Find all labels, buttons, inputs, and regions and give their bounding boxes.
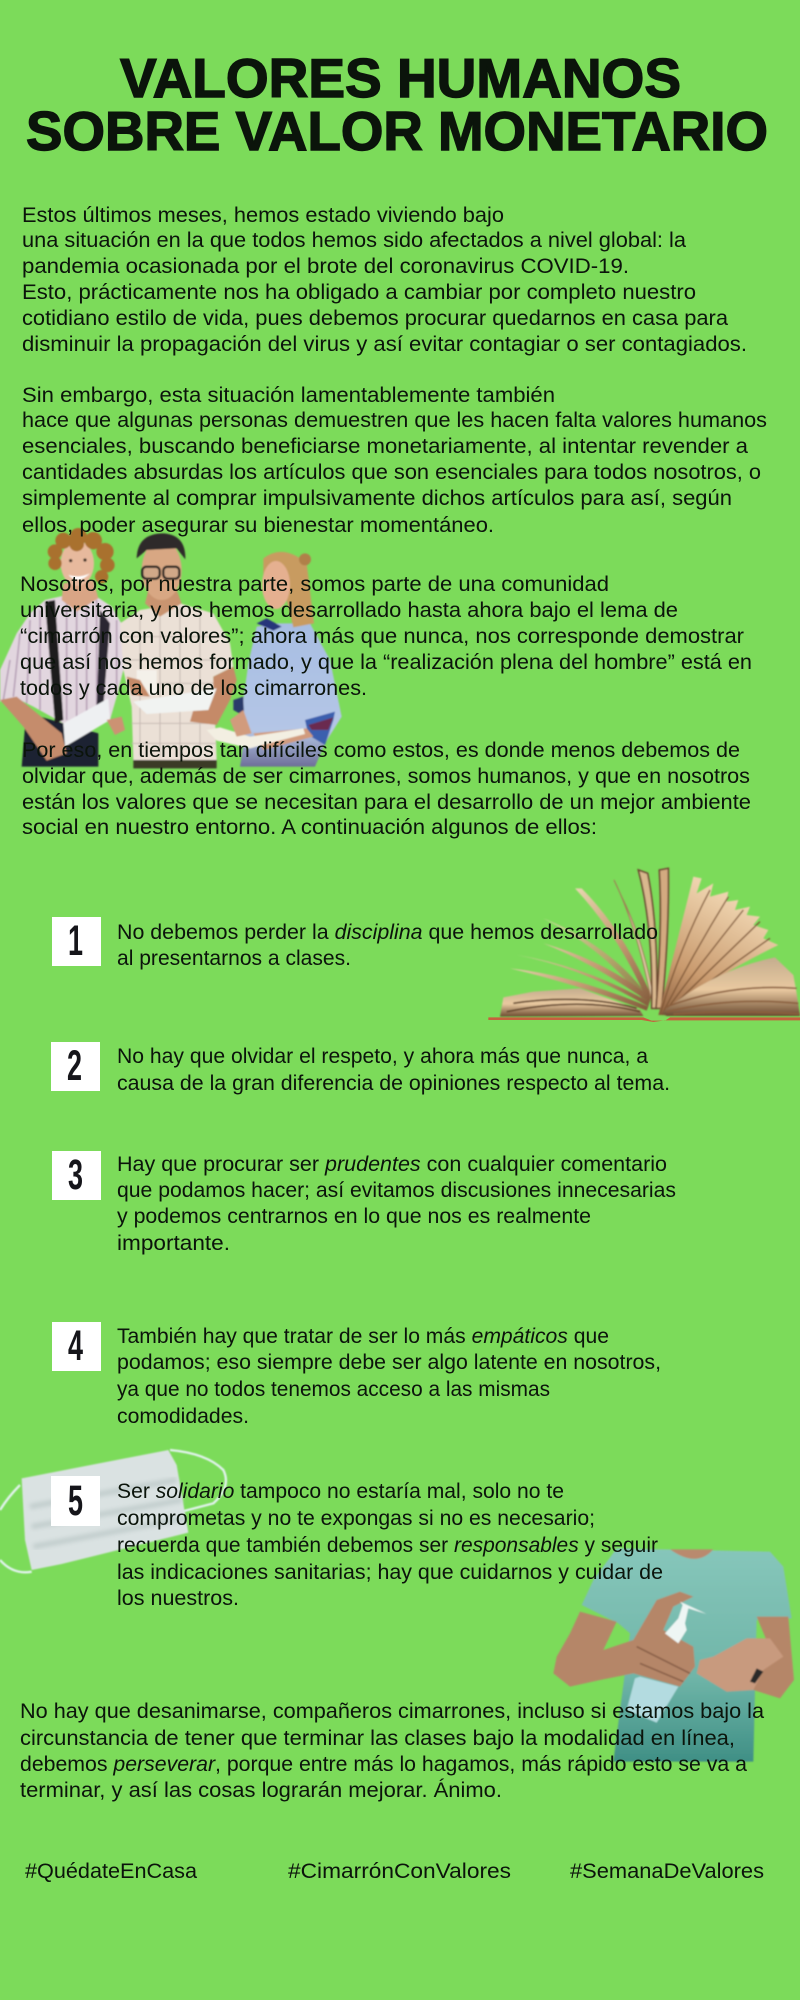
person middle — [120, 533, 237, 768]
value 5: recuerda que también debemos ser responsables y seguir — [117, 1533, 658, 1557]
intro paragraph 2: ellos, poder asegurar su bienestar momentáneo. — [22, 513, 494, 537]
intro paragraph 1: una situación en la que todos hemos sido afectados a nivel global: la — [22, 228, 686, 252]
intro paragraph 2 — [22, 383, 767, 537]
value 1: al presentarnos a clases. — [117, 946, 351, 970]
value 3: y podemos centrarnos en lo que nos es realmente — [117, 1204, 591, 1228]
number badge 2 — [51, 1042, 100, 1091]
value 4 — [52, 1322, 661, 1428]
value 5: Ser solidario tampoco no estaría mal, solo no te — [117, 1479, 564, 1503]
intro paragraph 2: cantidades absurdas los artículos que son esenciales para todos nosotros, o — [22, 460, 761, 484]
hashtags: #QuédateEnCasa — [25, 1859, 197, 1883]
sanitizer bottle — [627, 1677, 678, 1723]
closing paragraph: debemos perseverar, porque entre más lo hagamos, más rápido esto se va a — [20, 1752, 747, 1776]
intro paragraph 2: simplemente al comprar impulsivamente dichos artículos para así, según — [22, 486, 732, 510]
mask ear loops — [0, 1450, 226, 1572]
intro paragraph 1: Estos últimos meses, hemos estado viviendo bajo — [22, 203, 504, 227]
value 3 — [52, 1151, 676, 1255]
closing paragraph: No hay que desanimarse, compañeros cimarrones, incluso si estamos bajo la — [20, 1699, 764, 1723]
intro paragraph 3: universitaria, y nos hemos desarrollado hasta ahora bajo el lema de — [20, 598, 678, 622]
closing paragraph: circunstancia de tener que terminar las clases bajo la modalidad en línea, — [20, 1726, 735, 1750]
intro paragraph 3 — [20, 572, 752, 700]
value 2: No hay que olvidar el respeto, y ahora más que nunca, a — [117, 1044, 648, 1068]
intro paragraph 1: Esto, prácticamente nos ha obligado a cambiar por completo nuestro — [22, 280, 696, 304]
value 4: comodidades. — [117, 1404, 249, 1428]
photo: surgical mask — [0, 1450, 226, 1572]
number badge 3 — [52, 1151, 101, 1200]
value 1 — [52, 917, 658, 970]
mask body — [22, 1450, 188, 1570]
value 4: podamos; eso siempre debe ser algo latente en nosotros, — [117, 1350, 661, 1374]
intro paragraph 1: cotidiano estilo de vida, pues debemos procurar quedarnos en casa para — [22, 306, 728, 330]
intro paragraph 4 — [22, 738, 751, 839]
value 5: los nuestros. — [117, 1586, 239, 1610]
intro paragraph 2: hace que algunas personas demuestren que les hacen falta valores humanos — [22, 408, 767, 432]
closing paragraph: terminar, y así las cosas lograrán mejorar. Ánimo. — [20, 1777, 502, 1802]
intro paragraph 1: pandemia ocasionada por el brote del coronavirus COVID-19. — [22, 254, 629, 278]
arms and hands — [553, 1592, 695, 1687]
hashtags: #SemanaDeValores — [570, 1859, 764, 1883]
intro paragraph 1 — [22, 203, 747, 356]
intro paragraph 4: están los valores que se necesitan para el desarrollo de un mejor ambiente — [22, 790, 751, 814]
value 3: Hay que procurar ser prudentes con cualquier comentario — [117, 1152, 667, 1176]
curly hair — [48, 528, 115, 583]
number badge 1 — [52, 917, 101, 966]
value 1: No debemos perder la disciplina que hemos desarrollado — [117, 920, 658, 944]
value 2 — [51, 1042, 670, 1095]
title: VALORES HUMANOS — [120, 47, 681, 109]
closing paragraph — [20, 1699, 764, 1802]
number badge 4: 4 — [68, 1322, 83, 1370]
value 2: causa de la gran diferencia de opiniones respecto al tema. — [117, 1071, 670, 1095]
photo: open book — [488, 868, 800, 1022]
value 5 — [51, 1476, 663, 1610]
title: SOBRE VALOR MONETARIO — [26, 100, 768, 162]
person left — [0, 528, 125, 767]
photo: hands with sanitizer — [553, 1548, 794, 1762]
intro paragraph 2: Sin embargo, esta situación lamentablemente también — [22, 383, 555, 407]
teal shirt — [582, 1548, 792, 1762]
intro paragraph 3: que así nos hemos formado, y que la “realización plena del hombre” está en — [20, 650, 752, 674]
intro paragraph 4: Por eso, en tiempos tan difíciles como estos, es donde menos debemos de — [22, 738, 740, 762]
value 4: ya que no todos tenemos acceso a las mismas — [117, 1377, 550, 1401]
photo: three students — [0, 528, 342, 768]
number badge 5: 5 — [68, 1477, 83, 1525]
book cover — [488, 1017, 800, 1022]
intro paragraph 1: disminuir la propagación del virus y así evitar contagiar o ser contagiados. — [22, 332, 747, 356]
number badge 4 — [52, 1322, 101, 1371]
value 4: También hay que tratar de ser lo más empáticos que — [117, 1324, 609, 1348]
number badge 1: 1 — [68, 917, 83, 965]
intro paragraph 4: social en nuestro entorno. A continuación algunos de ellos: — [22, 815, 597, 839]
value 5: comprometas y no te expongas si no es necesario; — [117, 1506, 595, 1530]
number badge 3: 3 — [68, 1151, 83, 1199]
intro paragraph 3: todos y cada uno de los cimarrones. — [20, 676, 367, 700]
intro paragraph 3: “cimarrón con valores”; ahora más que nunca, nos corresponde demostrar — [20, 624, 744, 648]
intro paragraph 2: esenciales, buscando beneficiarse monetariamente, al intentar revender a — [22, 434, 748, 458]
hashtags — [25, 1859, 764, 1883]
hashtags: #CimarrónConValores — [288, 1859, 511, 1883]
value 3: importante. — [117, 1231, 230, 1255]
value 5: las indicaciones sanitarias; hay que cuidarnos y cuidar de — [117, 1560, 663, 1584]
title — [26, 47, 768, 162]
number badge 2: 2 — [67, 1042, 82, 1090]
person right — [207, 552, 342, 767]
value 3: que podamos hacer; así evitamos discusiones innecesarias — [117, 1178, 676, 1202]
book pages — [500, 868, 800, 1017]
number badge 5 — [51, 1476, 100, 1526]
intro paragraph 3: Nosotros, por nuestra parte, somos parte de una comunidad — [20, 572, 609, 596]
intro paragraph 4: olvidar que, además de ser cimarrones, somos humanos, y que en nosotros — [22, 764, 750, 788]
